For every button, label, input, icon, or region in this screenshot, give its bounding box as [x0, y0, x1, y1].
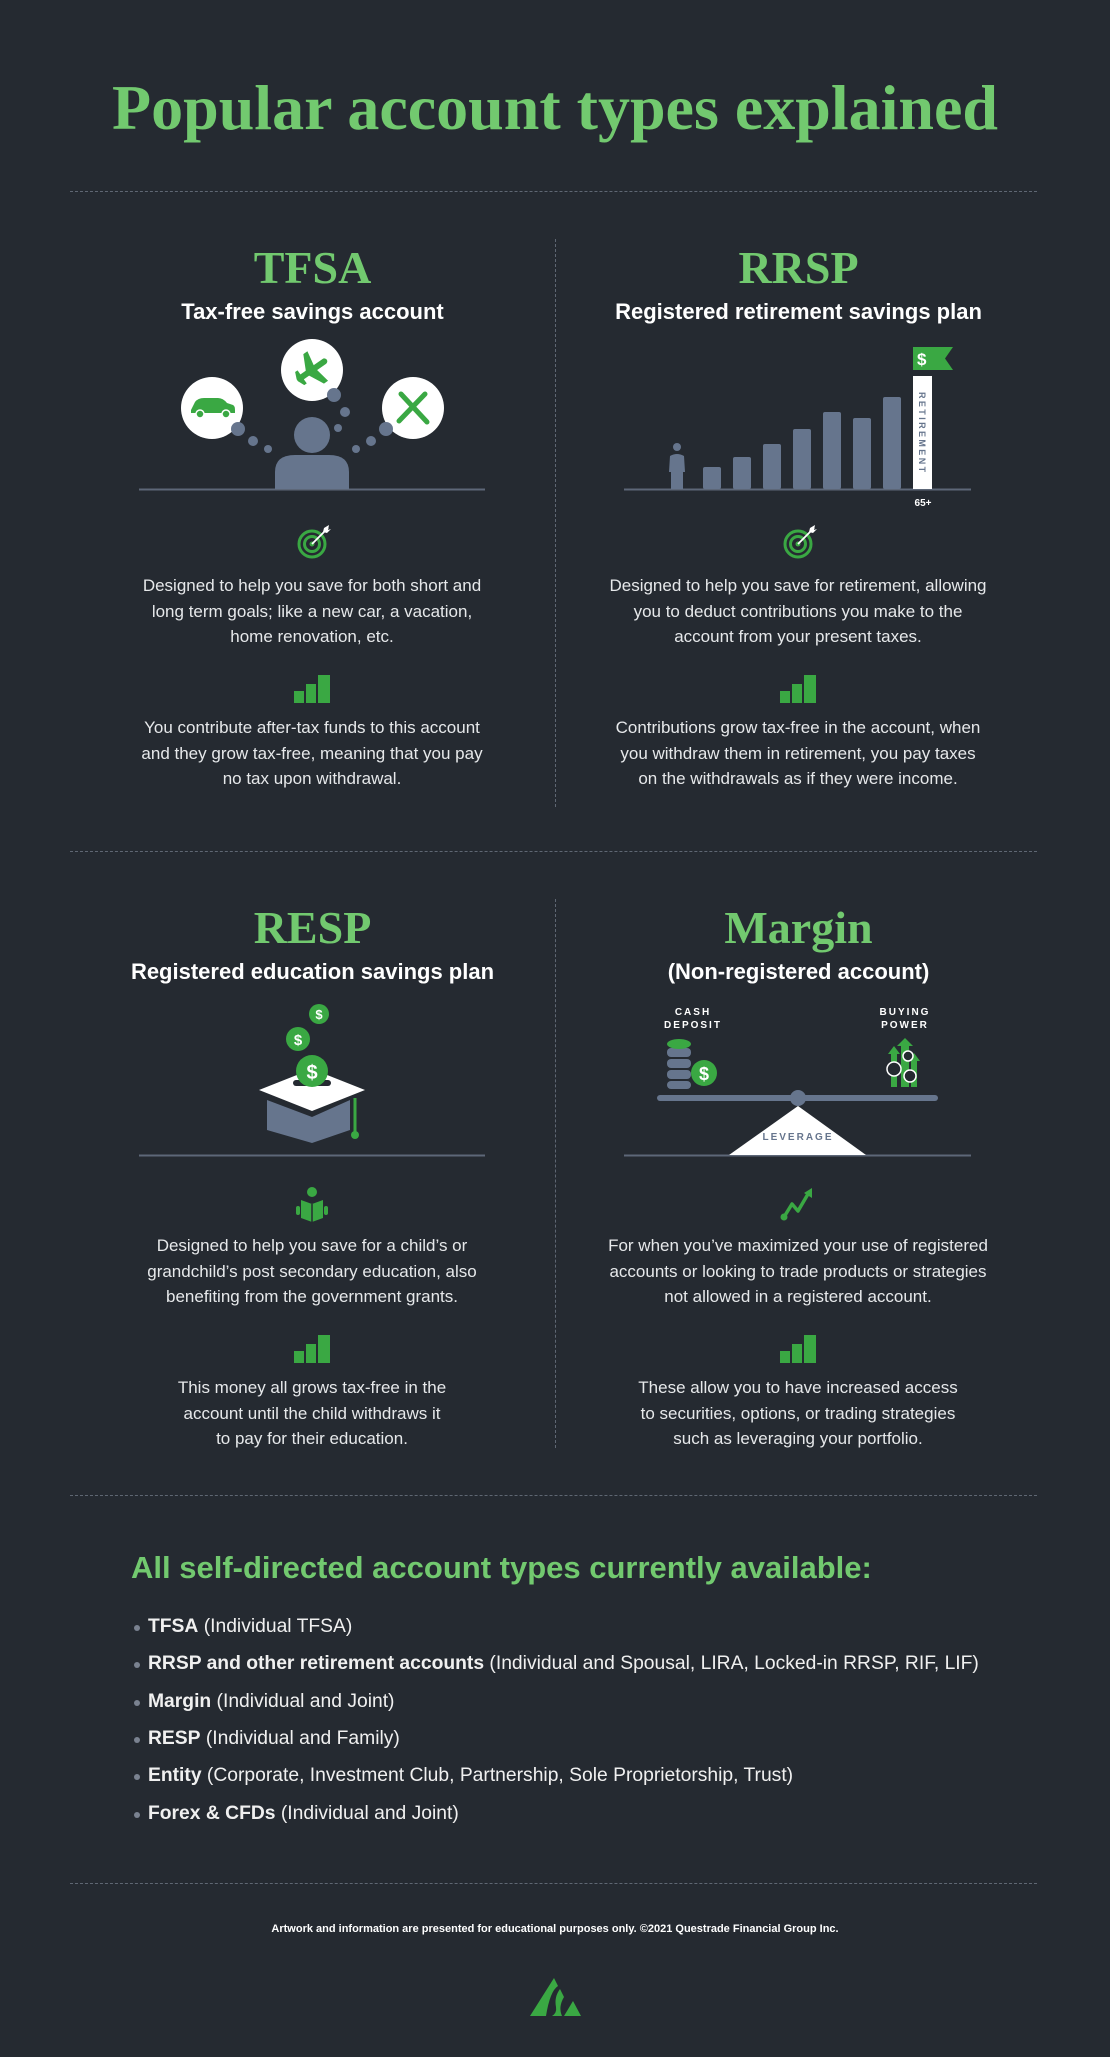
chart: savings growth to retirement: $ [917, 350, 927, 369]
text: TFSA tax: no tax upon withdrawal. [223, 769, 401, 788]
icon: trend arrow [780, 1188, 812, 1220]
icon: target [784, 525, 817, 558]
illustration: person thinking of goals [139, 339, 485, 490]
text: RESP description: Designed to help you save for a child’s or [157, 1236, 467, 1255]
illustration: leverage scale: BUYING [880, 1007, 930, 1018]
panel: RESP [131, 902, 494, 984]
text: RRSP tax: you withdraw them in retirement, you pay taxes [620, 744, 976, 763]
illustration: graduation cap with coins: $ [306, 1062, 318, 1084]
subtitle: Registered retirement savings plan: Registered retirement savings plan [615, 299, 982, 324]
text: RRSP description: account from your present taxes. [674, 627, 922, 646]
illustration: graduation cap with coins: $ [315, 1007, 323, 1022]
illustration: leverage scale: CASH [675, 1007, 711, 1018]
illustration: leverage scale: $ [699, 1064, 709, 1084]
text: RRSP tax [616, 718, 980, 788]
footer disclaimer: Artwork and information are presented for educational purposes only. ©2021 Questrade Financial Group Inc. [271, 1923, 839, 1935]
subtitle: Non-registered account: (Non-registered account) [668, 959, 929, 984]
text: TFSA tax [141, 718, 483, 788]
illustration: leverage scale: LEVERAGE [762, 1132, 834, 1143]
list: account types: Forex & CFDs (Individual and Joint) [148, 1803, 459, 1824]
subtitle: Registered education savings plan: Registered education savings plan [131, 959, 494, 984]
chart: savings growth to retirement: 65+ [915, 498, 932, 509]
title: Popular account types explained [112, 72, 998, 143]
chart: savings growth to retirement: RETIREMENT [917, 392, 927, 474]
text: Margin description: not allowed in a registered account. [664, 1287, 932, 1306]
icon: reader [296, 1187, 328, 1222]
text: Margin access: These allow you to have increased access [638, 1378, 958, 1397]
icon: growth bars [294, 1335, 330, 1363]
text: RESP description [147, 1236, 477, 1306]
text: RRSP description: you to deduct contributions you make to the [634, 602, 962, 621]
list: account types: RRSP and other retirement accounts (Individual and Spousal, LIRA, Locked-in RRSP, RIF, LIF) [148, 1653, 979, 1674]
text: TFSA description [143, 576, 481, 646]
text: TFSA tax: and they grow tax-free, meaning that you pay [141, 744, 483, 763]
panel: TFSA [181, 242, 444, 324]
text: Margin description: accounts or looking to trade products or strategies [609, 1262, 987, 1281]
text: Margin access: such as leveraging your portfolio. [673, 1429, 923, 1448]
text: Margin description: For when you’ve maximized your use of registered [608, 1236, 988, 1255]
heading: Margin: Margin [724, 902, 873, 953]
heading: RESP: RESP [254, 902, 371, 953]
text: Margin description [608, 1236, 988, 1306]
illustration: graduation cap with coins [139, 1004, 485, 1156]
heading: TFSA: TFSA [254, 242, 371, 293]
icon: growth bars [294, 675, 330, 703]
text: RESP growth: account until the child withdraws it [183, 1404, 441, 1423]
logo [530, 1978, 581, 2016]
icon: growth bars [780, 1335, 816, 1363]
text: RESP growth: This money all grows tax-free in the [178, 1378, 446, 1397]
text: RRSP description: Designed to help you save for retirement, allowing [609, 576, 987, 595]
text: TFSA description: long term goals; like a new car, a vacation, [152, 602, 472, 621]
text: RESP growth: to pay for their education. [216, 1429, 408, 1448]
list: account types: TFSA (Individual TFSA) [148, 1616, 352, 1637]
text: TFSA tax: You contribute after-tax funds to this account [144, 718, 480, 737]
illustration: leverage scale: POWER [881, 1020, 929, 1031]
list: account types: Entity (Corporate, Investment Club, Partnership, Sole Proprietorship, Trust) [148, 1765, 793, 1786]
text: RESP description: benefiting from the government grants. [166, 1287, 458, 1306]
panel: RRSP [615, 242, 982, 324]
text: RESP description: grandchild’s post secondary education, also [147, 1262, 477, 1281]
panel: Margin [668, 902, 929, 984]
text: Margin access: to securities, options, or trading strategies [641, 1404, 955, 1423]
text: TFSA description: home renovation, etc. [230, 627, 394, 646]
text: RESP growth [178, 1378, 446, 1448]
icon: target [298, 525, 331, 558]
text: Margin access [638, 1378, 958, 1448]
list: account types: Margin (Individual and Joint) [148, 1691, 394, 1712]
text: RRSP description [609, 576, 987, 646]
list: account types [134, 1616, 979, 1824]
illustration: graduation cap with coins: $ [294, 1032, 303, 1049]
text: TFSA description: Designed to help you save for both short and [143, 576, 481, 595]
heading: RRSP: RRSP [738, 242, 859, 293]
illustration: leverage scale: DEPOSIT [664, 1020, 722, 1031]
heading: all account types: All self-directed account types currently available: [131, 1550, 872, 1585]
chart: savings growth to retirement [624, 347, 971, 509]
text: RRSP tax: on the withdrawals as if they were income. [638, 769, 958, 788]
icon: growth bars [780, 675, 816, 703]
illustration: leverage scale [624, 1007, 971, 1156]
list: account types: RESP (Individual and Family) [148, 1728, 400, 1749]
subtitle: Tax-free savings account: Tax-free savings account [181, 299, 444, 324]
text: RRSP tax: Contributions grow tax-free in the account, when [616, 718, 980, 737]
